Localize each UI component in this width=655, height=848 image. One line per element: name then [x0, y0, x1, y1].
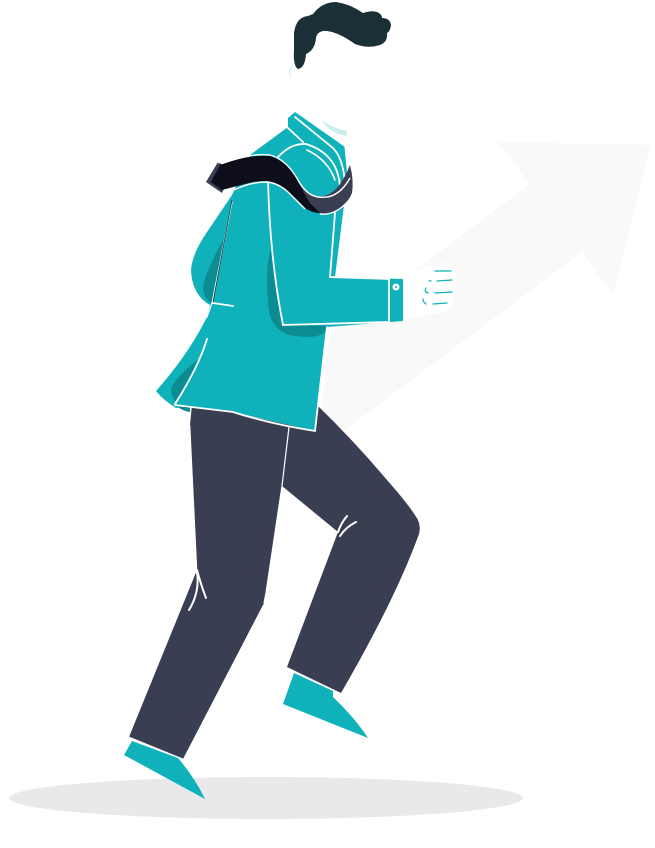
ear outline — [289, 66, 293, 77]
back shoe — [124, 741, 205, 799]
knee creases — [189, 516, 356, 610]
background arrow — [318, 142, 651, 436]
front shoe — [283, 673, 368, 738]
jacket — [156, 112, 403, 431]
hand — [403, 262, 457, 320]
neck shadow — [322, 120, 347, 136]
ground shadow — [9, 777, 523, 819]
hair — [294, 2, 391, 69]
jacket white seams — [175, 117, 389, 431]
jacket shadows — [203, 238, 224, 304]
cuff button — [392, 284, 400, 290]
scarf — [206, 155, 353, 214]
far leg — [282, 406, 420, 693]
near leg — [129, 404, 290, 759]
